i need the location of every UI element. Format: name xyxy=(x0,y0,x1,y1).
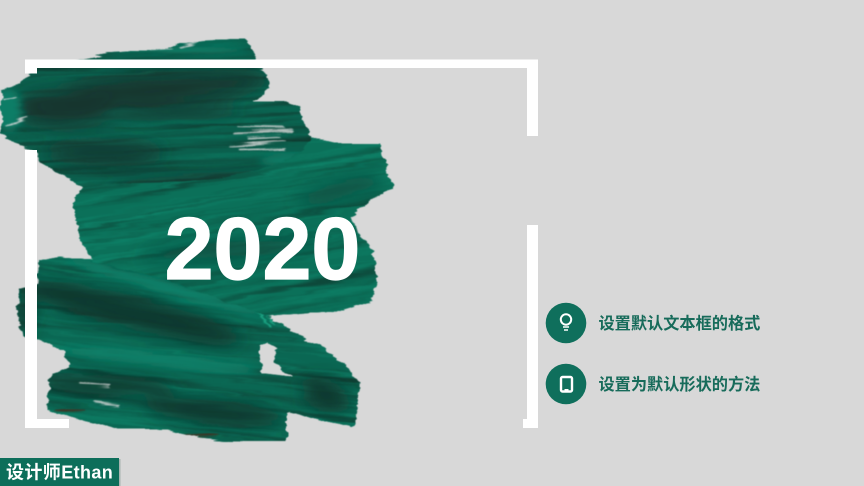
author label xyxy=(0,458,120,486)
icon: tablet badge xyxy=(546,364,586,404)
title: 2020: 2020 xyxy=(165,199,360,298)
text: item one: 设置默认文本框的格式 xyxy=(598,314,760,333)
paint brush stroke xyxy=(0,38,396,443)
icon: light bulb badge xyxy=(546,303,586,343)
text: item two: 设置为默认形状的方法 xyxy=(598,375,760,394)
author label: 设计师Ethan xyxy=(6,462,113,482)
white bracket frame xyxy=(25,60,538,428)
paint gap xyxy=(260,342,293,377)
paint flecks xyxy=(4,42,292,405)
